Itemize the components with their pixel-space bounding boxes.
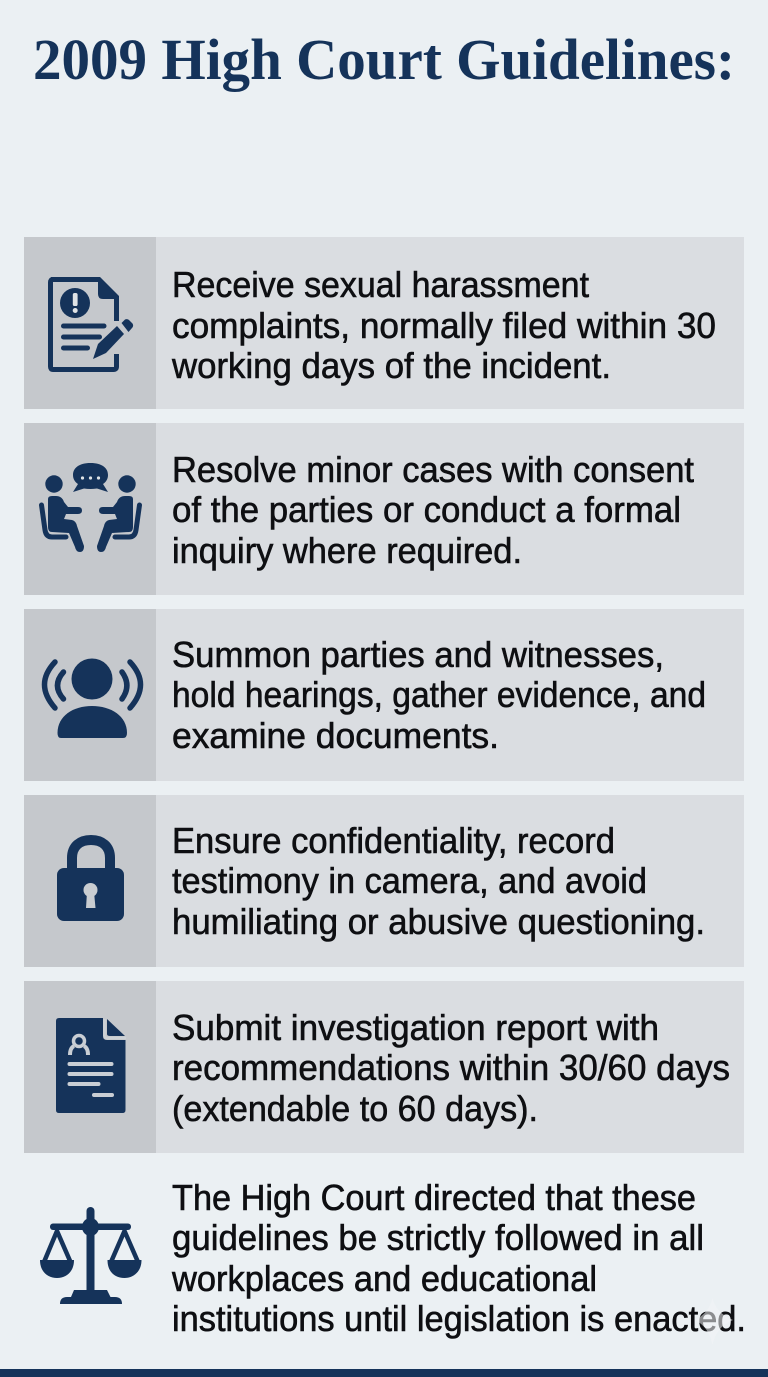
footer bar [0, 1369, 768, 1377]
text: receive complaints: Receive sexual harassment [172, 264, 589, 305]
text: investigation report [172, 1007, 730, 1129]
text: investigation report: (extendable to 60 days). [172, 1088, 538, 1129]
title: 2009 High Court Guidelines: [33, 27, 735, 92]
text: court direction: guidelines be strictly followed in all [172, 1217, 704, 1258]
text: resolve or inquire: Resolve minor cases with consent [172, 449, 694, 490]
panel: receive complaints [24, 237, 744, 409]
icon: padlock [57, 840, 124, 921]
panel: resolve or inquire [24, 423, 744, 595]
text: receive complaints: complaints, normally filed within 30 [172, 305, 716, 346]
text: resolve or inquire: of the parties or conduct a formal [172, 489, 681, 530]
icon: person with sound waves [44, 658, 140, 738]
text: confidentiality: humiliating or abusive questioning. [172, 901, 705, 942]
text: confidentiality: Ensure confidentiality, record [172, 820, 615, 861]
icon: report document [56, 1018, 126, 1113]
text: court direction: workplaces and educational [171, 1258, 597, 1299]
text: summon and hear: hold hearings, gather evidence, and [172, 674, 706, 715]
text: court direction: The High Court directed that these [172, 1177, 696, 1218]
text: summon and hear: examine documents. [172, 715, 499, 756]
text: confidentiality [172, 820, 705, 942]
text: court direction: institutions until legislation is enacted. [172, 1298, 746, 1339]
text: receive complaints [171, 264, 716, 386]
text: confidentiality: testimony in camera, and avoid [172, 860, 647, 901]
text: summon and hear: Summon parties and witnesses, [172, 634, 664, 675]
text: resolve or inquire: inquiry where required. [172, 530, 522, 571]
icon: scales of justice [40, 1207, 142, 1304]
icon: complaint document with pencil [50, 277, 133, 370]
text: resolve or inquire [172, 449, 694, 571]
panel: confidentiality [24, 795, 744, 967]
panel: summon and hear [24, 609, 744, 781]
watermark sparkle [695, 1298, 733, 1345]
text: investigation report: Submit investigation report with [172, 1007, 659, 1048]
text: court direction [171, 1177, 746, 1339]
text: summon and hear [172, 634, 706, 756]
text: investigation report: recommendations within 30/60 days [172, 1047, 730, 1088]
panel: investigation report [24, 981, 744, 1153]
panel: court direction [40, 1177, 746, 1339]
text: receive complaints: working days of the incident. [171, 345, 611, 386]
icon: two people in discussion [42, 463, 140, 552]
